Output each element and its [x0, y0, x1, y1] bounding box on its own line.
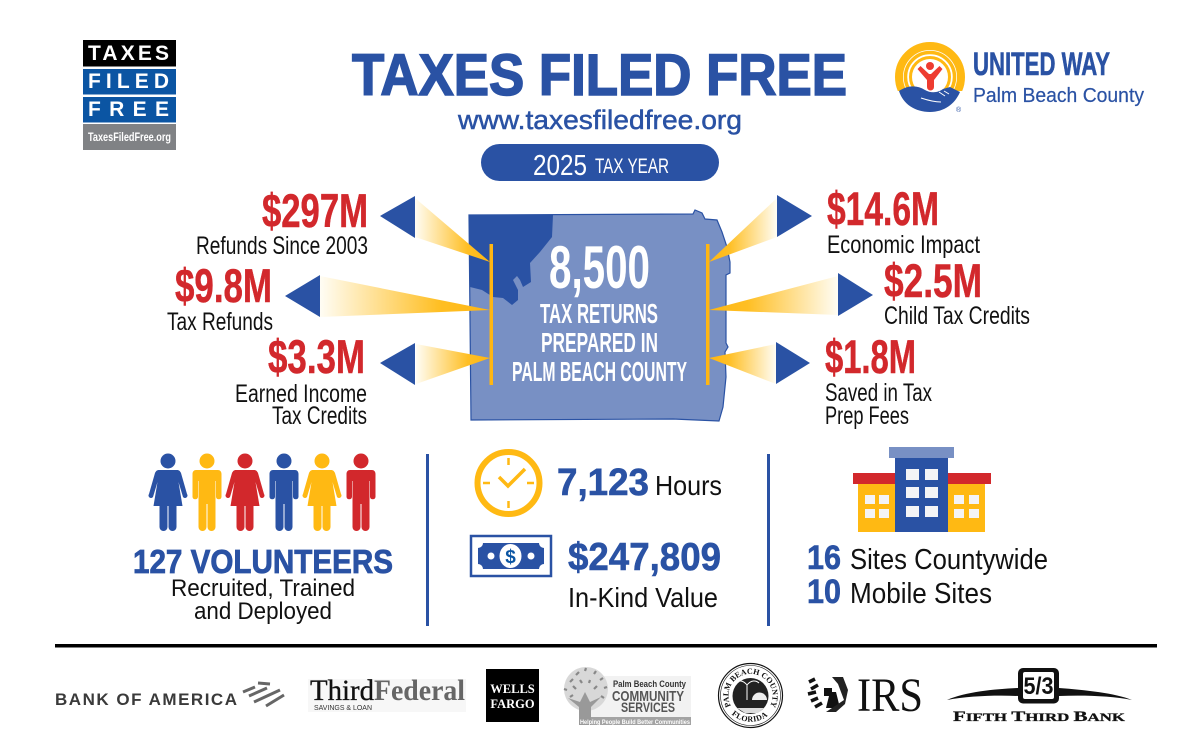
- icon: dollar bill: [471, 536, 551, 576]
- person: [918, 62, 942, 90]
- volunteers text: [133, 543, 393, 625]
- sponsor: Palm Beach County seal: [718, 662, 784, 728]
- title: TAXES FILED FREE: [352, 43, 847, 108]
- stat: child tax credits: $2.5M: [884, 254, 982, 307]
- stat: sites: [807, 539, 1048, 611]
- centre statistic: 8,500 tax returns: [512, 234, 687, 387]
- sponsor: Bank of America: BANK OF AMERICA: [55, 690, 237, 709]
- arrow: earned income tax credits: [380, 343, 415, 385]
- sponsor: Fifth Third Bank: [947, 668, 1132, 725]
- sponsor: Third Federal: Third: [310, 674, 374, 707]
- stat: earned income tax credits: Tax Credits: [272, 402, 367, 430]
- logo: United Way Palm Beach County: [899, 46, 1144, 114]
- woman yellow: [303, 454, 341, 531]
- logo: United Way Palm Beach County: ®: [956, 106, 962, 114]
- sponsor: IRS: IRS: [857, 669, 923, 722]
- sponsor: Palm Beach County Community Services: Palm Beach County: [613, 679, 686, 689]
- icon: dollar bill: $: [505, 547, 516, 568]
- sponsor: Wells Fargo: FARGO: [490, 697, 535, 711]
- sponsor: Palm Beach County seal: FLORIDA: [732, 710, 768, 722]
- sponsor: Fifth Third Bank: 5/3: [1024, 673, 1054, 700]
- sponsor: Palm Beach County Community Services: Helping People Build Better Communities: [580, 719, 690, 726]
- stat: tax refunds: Tax Refunds: [167, 308, 273, 336]
- arrow: child tax credits: [838, 273, 873, 316]
- stat: child tax credits: Child Tax Credits: [884, 302, 1030, 330]
- stat: saved in tax prep fees: $1.8M: [825, 330, 916, 383]
- sponsor: Fifth Third Bank: F IFTH T HIRD B ANK: [953, 709, 1126, 725]
- sponsor: Wells Fargo: WELLS: [490, 682, 535, 696]
- county map: [469, 210, 730, 421]
- stat: tax refunds: $9.8M: [175, 259, 272, 312]
- stat: refunds since 2003: $297M: [262, 184, 368, 237]
- sponsor: Wells Fargo: [486, 669, 539, 722]
- arrow: tax refunds: [285, 275, 320, 317]
- logo: Taxes Filed Free: FILED: [88, 70, 169, 93]
- stat: child tax credits: [884, 254, 1030, 330]
- stat: in-kind value: [568, 536, 721, 613]
- icon: building: [853, 447, 991, 532]
- sponsor: Bank of America: [55, 683, 284, 709]
- stat: saved in tax prep fees: Saved in Tax: [825, 379, 932, 407]
- sponsor: Palm Beach County Community Services: [564, 667, 691, 726]
- stat: saved in tax prep fees: Prep Fees: [825, 402, 909, 430]
- icon: six volunteers: [149, 454, 376, 531]
- logo: United Way Palm Beach County: UNITED WAY: [973, 46, 1110, 82]
- volunteers text: and Deployed: [194, 598, 332, 625]
- arrow: saved in tax prep fees: [776, 342, 810, 384]
- man yellow: [192, 454, 222, 531]
- stat: economic impact: Economic Impact: [827, 231, 980, 259]
- logo: Taxes Filed Free: [83, 40, 176, 150]
- sponsor: Third Federal: [308, 674, 466, 712]
- stat: saved in tax prep fees: [825, 330, 932, 430]
- website url: www.taxesfiledfree.org: [457, 105, 742, 135]
- logo: Taxes Filed Free: TaxesFiledFree.org: [88, 130, 171, 144]
- tax year pill: [481, 144, 719, 182]
- bracket lines and light beams: [320, 198, 838, 385]
- stat: hours: 7,123: [557, 462, 649, 504]
- sponsor: IRS: [808, 669, 923, 722]
- man red: [346, 454, 376, 531]
- stat: economic impact: [827, 182, 980, 259]
- stat: earned income tax credits: $3.3M: [268, 330, 365, 383]
- centre statistic: 8,500 tax returns: PALM BEACH COUNTY: [512, 356, 687, 387]
- tax year pill: TAX YEAR: [595, 155, 669, 178]
- centre statistic: 8,500 tax returns: 8,500: [549, 234, 650, 301]
- stat: refunds since 2003: Refunds Since 2003: [196, 232, 368, 260]
- stat: economic impact: $14.6M: [827, 182, 939, 235]
- stat: hours: [557, 462, 722, 504]
- arrow: economic impact: [777, 195, 812, 237]
- centre statistic: 8,500 tax returns: TAX RETURNS: [540, 298, 658, 329]
- volunteers text: Recruited, Trained: [171, 575, 355, 602]
- stat: tax refunds: [167, 259, 273, 336]
- stat: earned income tax credits: Earned Income: [235, 380, 367, 408]
- stat: hours: Hours: [655, 470, 722, 501]
- logo: Taxes Filed Free: TAXES: [88, 42, 169, 65]
- stat: in-kind value: In-Kind Value: [568, 582, 718, 613]
- sponsor: Third Federal: Federal: [374, 674, 465, 707]
- stat: refunds since 2003: [196, 184, 368, 260]
- woman red: [226, 454, 264, 531]
- man blue: [270, 454, 298, 531]
- stat: in-kind value: $247,809: [568, 536, 721, 579]
- icon: clock: [478, 452, 540, 514]
- stat: sites: 10: [807, 573, 841, 611]
- stat: earned income tax credits: [235, 330, 367, 430]
- stat: sites: Mobile Sites: [850, 578, 992, 610]
- sponsor: Third Federal: SAVINGS & LOAN: [314, 703, 372, 712]
- tax year pill: 2025: [533, 150, 587, 182]
- centre statistic: 8,500 tax returns: PREPARED IN: [541, 327, 658, 358]
- logo: Taxes Filed Free: FREE: [88, 98, 169, 121]
- sponsor: Palm Beach County seal: PALM BEACH COUNTY: [723, 668, 778, 708]
- arrow: refunds since 2003: [380, 196, 415, 238]
- sponsor: Palm Beach County Community Services: SERVICES: [621, 699, 675, 715]
- logo: United Way Palm Beach County: Palm Beach County: [973, 85, 1144, 107]
- stat: sites: 16: [807, 539, 841, 577]
- sponsor: Palm Beach County Community Services: COMMUNITY: [612, 688, 684, 705]
- volunteers text: 127 VOLUNTEERS: [133, 543, 393, 580]
- stat: sites: Sites Countywide: [850, 544, 1048, 576]
- woman blue: [149, 454, 187, 531]
